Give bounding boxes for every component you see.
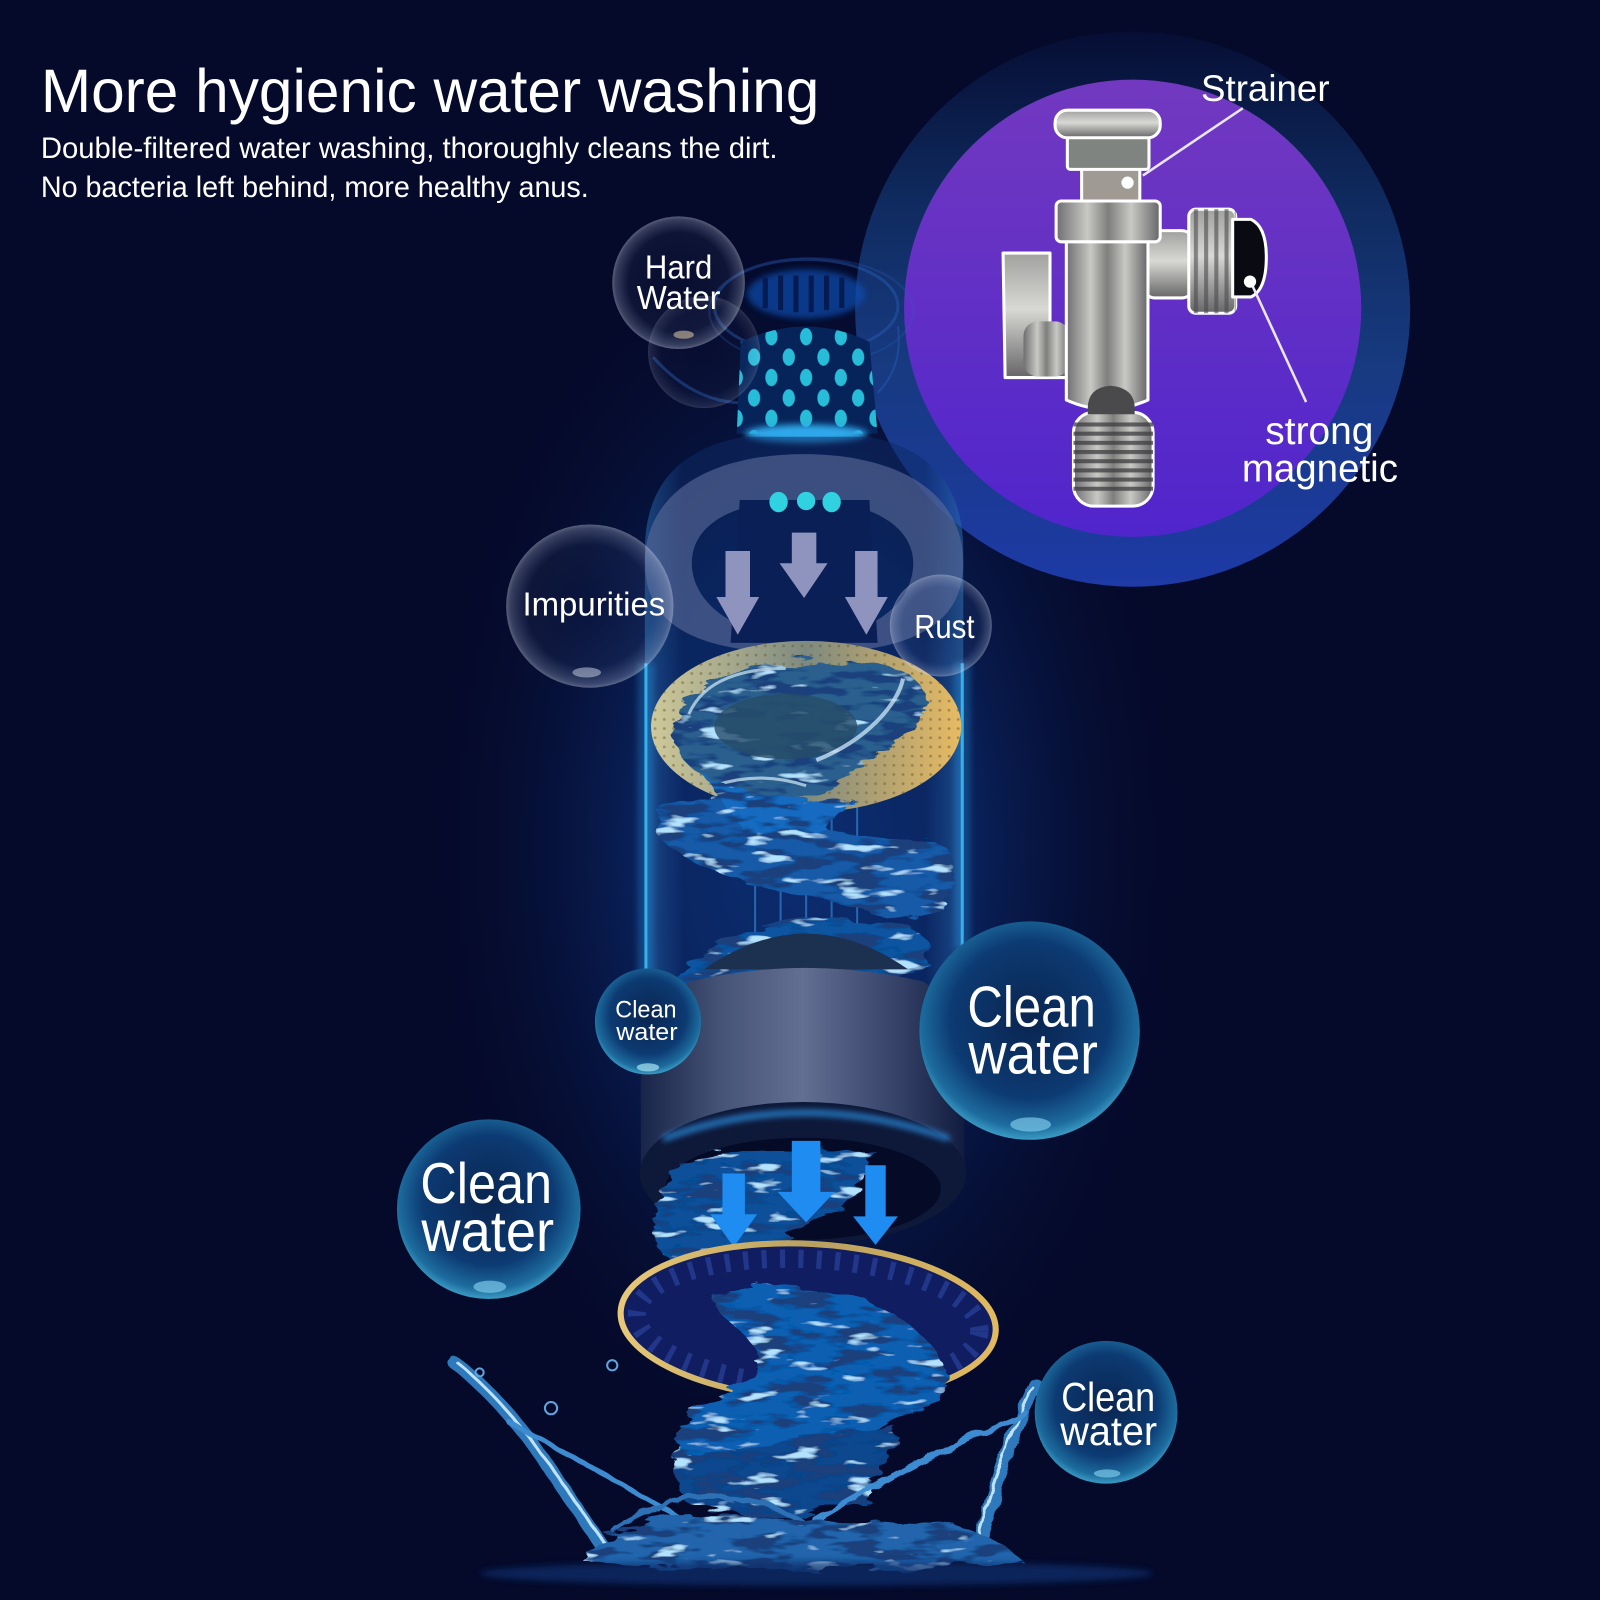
title: More hygienic water washing: [41, 57, 819, 125]
bubble: large Clean water right: [919, 921, 1140, 1140]
lower water spiral: [654, 1150, 878, 1260]
water surface reflection: [480, 1561, 1153, 1586]
bubble: Hard Water: Hard: [645, 250, 712, 287]
bubble: lower right Clean water: water: [1059, 1408, 1157, 1454]
label: strong magnetic: strong: [1265, 410, 1373, 453]
bubble: Hard Water: Water: [637, 280, 720, 317]
purple circle: [904, 80, 1361, 537]
bubble: small Clean water: [595, 968, 701, 1074]
bubble: large Clean water left: [397, 1119, 581, 1299]
blue rim light: [663, 1113, 949, 1139]
subtitle text: [41, 132, 778, 204]
blue arrows: [710, 1141, 898, 1247]
band body: [641, 968, 964, 1173]
water splash: [454, 1360, 1153, 1586]
navy ribbed disc: [617, 1234, 1000, 1409]
bubble: large Clean water left: water: [420, 1200, 554, 1264]
background blue glow: [204, 255, 1408, 1582]
metal band housing: [640, 968, 966, 1245]
bubble: large Clean water right: water: [967, 1022, 1098, 1086]
bubble: small Clean water: Clean: [615, 996, 677, 1023]
filter top grille: [747, 269, 865, 318]
perforated disc: [651, 641, 961, 812]
splash base: [584, 1516, 1023, 1570]
bubble: Impurities: [506, 524, 673, 688]
label: strong magnetic: [1242, 410, 1398, 491]
magnet pointer: [1244, 276, 1306, 402]
tube body: [645, 437, 963, 1153]
bubble: large Clean water left: Clean: [420, 1152, 552, 1216]
opening: [665, 1138, 941, 1240]
bubble: lower right Clean water: Clean: [1061, 1374, 1155, 1420]
strainer pointer: [1121, 108, 1243, 189]
perforated cylinder: [737, 327, 878, 443]
inner light rays: [755, 796, 857, 949]
label: strong magnetic: magnetic: [1242, 448, 1398, 491]
bright tube edges: [646, 663, 962, 1005]
bubble: large Clean water right: Clean: [967, 976, 1096, 1040]
swirl rings around filter: [653, 258, 913, 403]
bubble: Rust: [890, 574, 992, 677]
grey arrows: [716, 533, 888, 635]
subtitle text: No bacteria left behind, more healthy anus.: [41, 171, 589, 204]
top mesh filter: [653, 258, 913, 443]
swirling water on disc: [673, 661, 926, 803]
glass filter tube: [645, 437, 963, 1153]
panel: valve callout circle: [855, 32, 1410, 587]
valve handle: [1003, 253, 1069, 378]
splash crown left and right: [454, 1362, 1036, 1551]
water column through disc: [673, 1285, 945, 1515]
bubble: Rust: Rust: [914, 609, 975, 646]
bubble: Impurities: Impurities: [522, 586, 665, 623]
label: Strainer: Strainer: [1201, 68, 1330, 109]
droplets: [476, 1360, 617, 1414]
upper translucent ring: [645, 454, 963, 653]
dark dome behind band: [704, 934, 908, 969]
outer halo circle: [855, 32, 1410, 587]
golden filter disc with water: [651, 641, 961, 812]
valve product photo: [1003, 110, 1266, 506]
bubble: small Clean water: water: [615, 1019, 678, 1046]
gold ring filter disc: [617, 1234, 1000, 1409]
inner pipe with cyan holes: [731, 492, 878, 643]
dark lower rim: [640, 1102, 966, 1245]
bubble: lower right Clean water: [1035, 1341, 1178, 1484]
bubble: Hard Water: [612, 216, 760, 408]
valve strainer neck: [1055, 110, 1160, 209]
subtitle text: Double-filtered water washing, thoroughly cleans the dirt.: [41, 132, 778, 165]
valve body: [1056, 201, 1160, 506]
side outlet with magnet: [1143, 209, 1266, 313]
upper water spiral: [655, 776, 955, 996]
